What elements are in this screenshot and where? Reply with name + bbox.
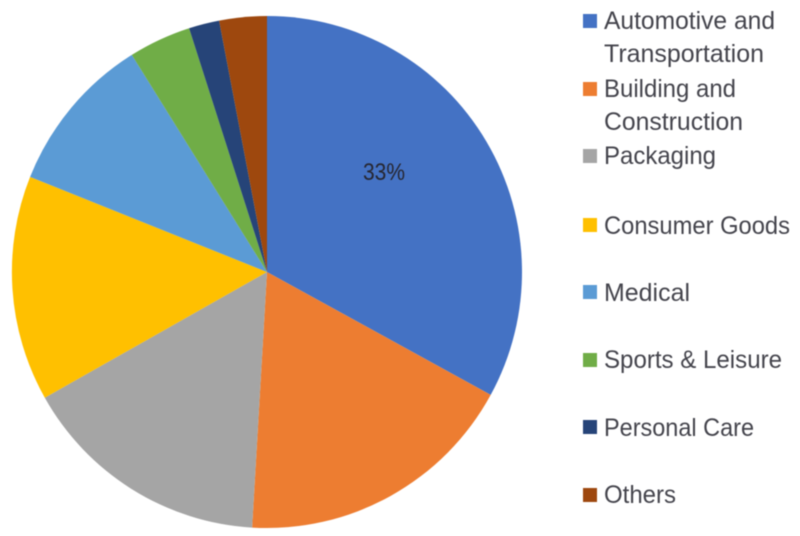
- pie chart: [12, 16, 522, 528]
- legend item: Packaging: Packaging: [604, 142, 716, 170]
- slice: Consumer Goods: [12, 177, 267, 398]
- legend item: Automotive and Transportation: Transportation: [604, 40, 764, 68]
- slice: Building and Construction: [252, 272, 491, 528]
- legend item: Building and Construction: Construction: [604, 108, 743, 136]
- legend item: Personal Care: Personal Care: [604, 414, 754, 442]
- legend item: Sports & Leisure: Sports & Leisure: [604, 346, 782, 374]
- legend item: Automotive and Transportation: [583, 7, 775, 68]
- legend item: Consumer Goods: Consumer Goods: [604, 212, 790, 240]
- legend: [583, 7, 790, 509]
- slice: Medical: [30, 55, 267, 272]
- slice: Automotive and Transportation: [267, 16, 522, 395]
- data label: 33%: 33%: [363, 159, 405, 186]
- slice: Personal Care: [189, 21, 267, 272]
- slice: Others: [219, 16, 267, 272]
- legend item: Others: Others: [604, 481, 676, 509]
- legend item: Building and Construction: [583, 75, 743, 136]
- legend item: Building and Construction: Building and: [604, 75, 736, 103]
- slice: Packaging: [45, 272, 267, 528]
- legend item: Medical: Medical: [604, 279, 690, 307]
- slice: Sports & Leisure: [132, 28, 267, 272]
- legend item: Automotive and Transportation: Automotive and: [604, 7, 775, 35]
